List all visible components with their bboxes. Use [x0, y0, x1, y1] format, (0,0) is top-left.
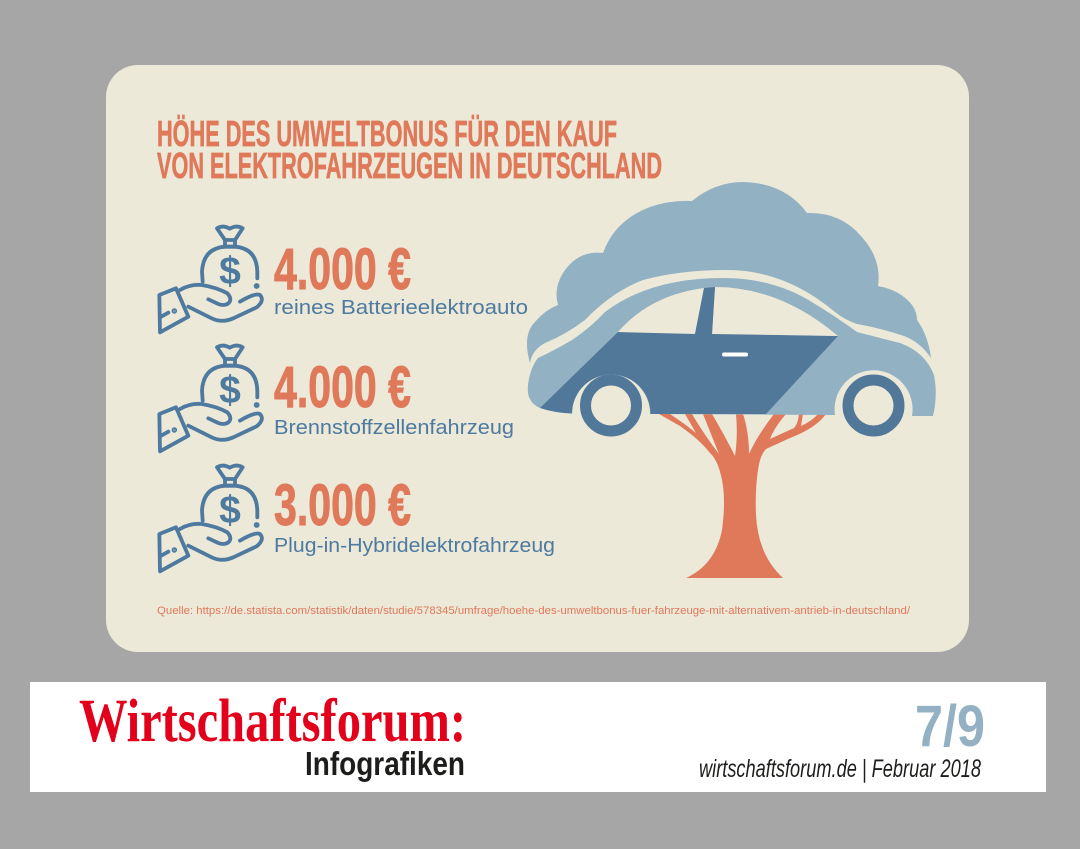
- door handle: [722, 352, 748, 356]
- heading: HÖHE DES UMWELTBONUS FÜR DEN KAUF: [157, 113, 617, 154]
- tree canopy: [527, 182, 931, 363]
- panel: main card: [106, 65, 969, 652]
- amount 2: 4.000 €: [274, 355, 411, 420]
- page number: 7/9: [915, 694, 985, 759]
- rear window: [618, 288, 704, 334]
- window pillar: [695, 287, 715, 334]
- panel: footer: [30, 682, 1046, 792]
- icon: dollar sign 1: $: [219, 250, 241, 293]
- icon: dollar sign 3: $: [219, 489, 241, 532]
- label 3: Plug-in-Hybridelektrofahrzeug: [274, 535, 555, 557]
- icon: hand with money bag 1: [159, 227, 262, 332]
- source: Quelle: https://de.statista.com/statistik/daten/studie/578345/umfrage/hoehe-des-umweltbonus-fuer-fahrzeuge-mit-alternativem-antrieb-in-deutschland/: [157, 605, 911, 617]
- website and date: wirtschaftsforum.de | Februar 2018: [699, 755, 981, 783]
- front window: [712, 287, 838, 336]
- label 1: reines Batterieelektroauto: [274, 297, 528, 319]
- heading: [157, 113, 662, 186]
- car door panel: [540, 332, 838, 414]
- icon: hand with money bag 3: [159, 466, 262, 571]
- car body: [528, 278, 936, 416]
- left wheel: [586, 380, 636, 431]
- icon: hand with money bag 2: [159, 346, 262, 451]
- brand name: Wirtschaftsforum:: [79, 688, 466, 755]
- subtitle: Infografiken: [305, 745, 465, 782]
- icon: dollar sign 2: $: [219, 369, 241, 412]
- right wheel: [848, 380, 899, 431]
- tree trunk and branches: [659, 414, 826, 578]
- heading: VON ELEKTROFAHRZEUGEN IN DEUTSCHLAND: [157, 145, 662, 186]
- illustration: car tree: [527, 182, 936, 578]
- amount 1: 4.000 €: [274, 237, 411, 302]
- label 2: Brennstoffzellenfahrzeug: [274, 417, 514, 439]
- amount 3: 3.000 €: [274, 473, 411, 538]
